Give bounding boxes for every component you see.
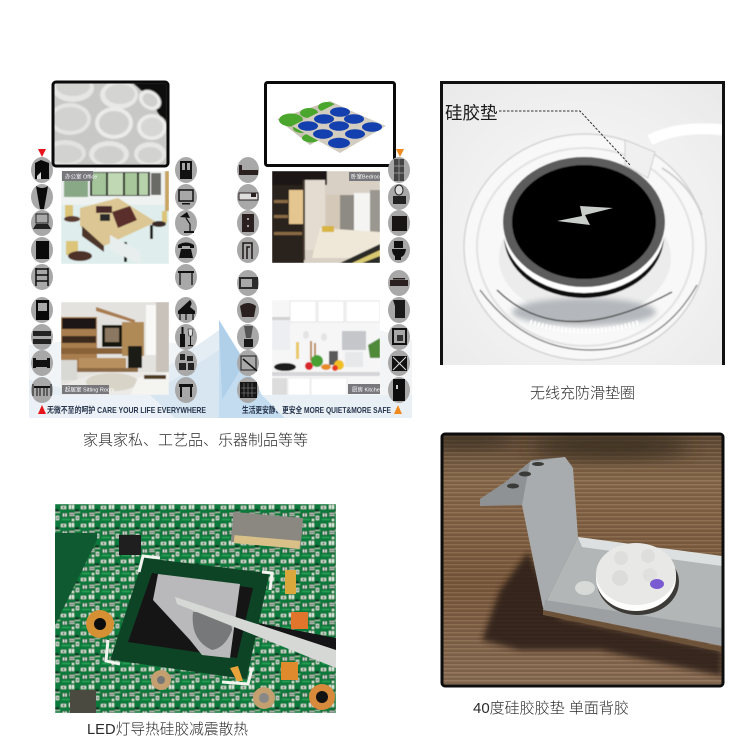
photo: silicone bumpers (52, 80, 170, 168)
icon: chopping board (237, 350, 259, 376)
photo: kitchen (272, 300, 380, 395)
caption: LED: LED灯导热硅胶减震散热 (87, 721, 248, 738)
icon: table (175, 264, 197, 290)
icon: lightning bolt (557, 206, 613, 225)
photo: sitting room (61, 302, 169, 395)
label: silicone pad callout: 硅胶垫 (445, 103, 498, 123)
icon: stool (175, 377, 197, 403)
panel: wood table bracket photo (415, 429, 723, 686)
icon: telephone (175, 237, 197, 263)
icon: cupboard (175, 157, 197, 183)
icon: rice cooker (237, 297, 259, 323)
icon: orange triangle (394, 405, 402, 414)
icon: blender (237, 324, 259, 350)
icon: sofa (31, 350, 53, 376)
marker: red triangle (38, 149, 46, 157)
label: office tag: 办公室 Office (65, 172, 97, 180)
label: sitting room tag: 起居室 Sitting Room (65, 386, 115, 394)
panel: PCB photo (55, 504, 336, 713)
icon: piano (175, 297, 197, 323)
icon: monitor (175, 184, 197, 210)
icon: kettle (388, 297, 410, 323)
icon: audio (31, 324, 53, 350)
icon: red triangle (38, 405, 46, 414)
panel: wireless charger photo (440, 81, 725, 365)
label: bedroom tag: 卧室Bedroom (351, 172, 385, 180)
icon: dresser (237, 210, 259, 236)
icons column: home right (388, 157, 410, 403)
photo: green and blue pads (266, 82, 394, 166)
icon: laptop (31, 210, 53, 236)
icon: tall cabinet (388, 157, 410, 183)
icon: wardrobe (31, 157, 53, 183)
icon: refrigerator (388, 377, 410, 403)
icons column: office right (175, 157, 197, 403)
label: kitchen tag: 厨房 Kitchen (352, 386, 383, 394)
caption: furniture: 家具家私、工艺品、乐器制品等等 (83, 432, 308, 449)
marker: orange triangle (396, 149, 404, 157)
icon: pan (388, 270, 410, 296)
icon: microwave (237, 270, 259, 296)
icon: wine (175, 324, 197, 350)
icon: tv cabinet (31, 297, 53, 323)
icon: vanity mirror (388, 184, 410, 210)
caption: wireless charger: 无线充防滑垫圈 (530, 385, 635, 402)
strapline: more quiet more safe: 生活更安静、更安全 MORE QUIET&MORE SAFE (242, 405, 391, 415)
icon: chest of drawers (388, 210, 410, 236)
icon: bed (237, 157, 259, 183)
label: silicone pad callout (445, 103, 630, 165)
icon: toilet (388, 237, 410, 263)
icon: dining set (31, 377, 53, 403)
icon: shelf (31, 264, 53, 290)
icon: crafts (175, 350, 197, 376)
icon: vase (31, 184, 53, 210)
caption: single-side adhesive: 40度硅胶胶垫 单面背胶 (473, 700, 629, 717)
icons column: office left (31, 157, 53, 403)
icons column: home left (237, 157, 259, 403)
icon: door frame (237, 237, 259, 263)
icon: oven (237, 377, 259, 403)
panel: furniture background with blue shards (29, 150, 412, 418)
photo: bedroom (272, 171, 380, 263)
icon: desk lamp (175, 210, 197, 236)
strapline: care your life: 无微不至的呵护 CARE YOUR LIFE EVERYWHERE (47, 405, 206, 415)
icon: gas stove (388, 350, 410, 376)
photo: office (61, 171, 169, 264)
icon: cabinet (31, 237, 53, 263)
icon: coffee machine (388, 324, 410, 350)
icon: tv stand (237, 184, 259, 210)
